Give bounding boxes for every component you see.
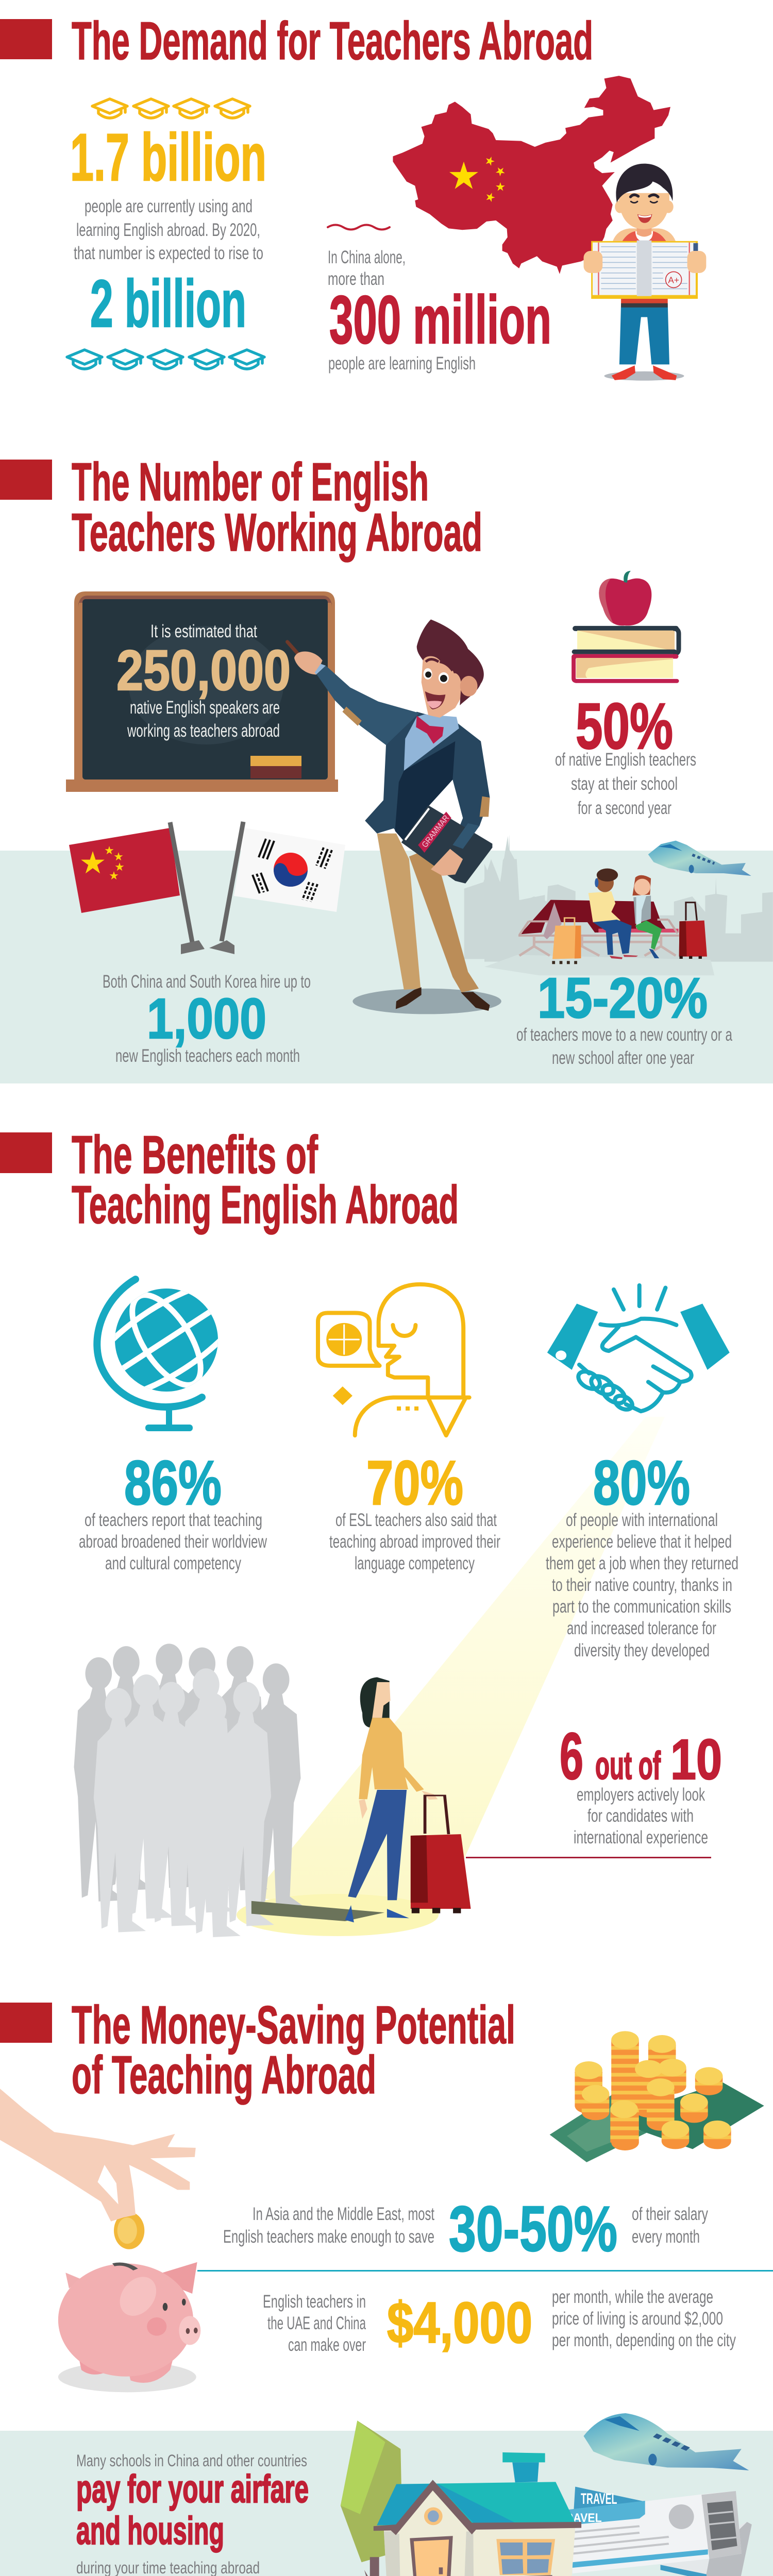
- stat: 70%: 70%: [366, 1448, 463, 1518]
- text: worldview: [79, 1510, 267, 1573]
- stat: pay for your airfare and housing: [76, 2467, 309, 2553]
- text: new teachers each month: new English teachers each month: [115, 1046, 300, 1066]
- text: per month: [552, 2287, 736, 2350]
- icons: yellow graduation caps: [92, 99, 250, 118]
- illustration: boy holding open book: [583, 164, 706, 381]
- text: employers look: [574, 1785, 708, 1848]
- text: teachers in UAE and China: the UAE and China: [267, 2313, 366, 2333]
- heading: [72, 452, 482, 563]
- stat: $4,000: $4,000: [387, 2291, 532, 2355]
- illustration: tickets, plane and house: [341, 2413, 752, 2576]
- text: worldview: and cultural competency: [105, 1553, 241, 1573]
- text: in China alone: [328, 247, 406, 289]
- text: of their salary: of their salary: [632, 2204, 708, 2224]
- stat: 250,000: 250,000: [116, 639, 291, 702]
- stat: 6 out of 10: [560, 1720, 722, 1793]
- text: employers look: employers actively look: [577, 1785, 705, 1805]
- section marker: [0, 1132, 52, 1173]
- panel: airfare and housing: [0, 2413, 773, 2576]
- text: stay for second year: for a second year: [578, 798, 671, 818]
- section 3: the benefits of teaching English abroad: [0, 1125, 738, 1937]
- stat: 80%: 80%: [593, 1448, 690, 1518]
- text: people currently learning: [74, 196, 263, 263]
- stat: 6 out of 10: 10: [670, 1728, 722, 1791]
- heading: [72, 1125, 459, 1235]
- stat: 2 billion: 2 billion: [90, 266, 246, 341]
- spotlight beam: [237, 1417, 665, 1936]
- section marker: [0, 460, 52, 500]
- illustration: travellers at airport bench: [518, 869, 708, 962]
- illustration: flag of China: [69, 822, 205, 954]
- icon: globe: [93, 1276, 218, 1431]
- section 1: the demand for teachers abroad: [0, 11, 706, 381]
- section 2: the number of English teachers working abroad: [0, 452, 773, 1083]
- text: language competency: language competency: [355, 1553, 475, 1573]
- text: worldview: abroad broadened their worldview: [79, 1532, 267, 1552]
- text: employers look: international experience: [574, 1827, 708, 1848]
- illustration: tickets, plane and house: TRAVEL: [581, 2490, 617, 2507]
- stat: 86%: 86%: [124, 1448, 222, 1518]
- illustration: plane: [648, 841, 751, 876]
- illustration: teacher pointing at board: GRAMMAR: [421, 814, 451, 850]
- text: in China alone: In China alone,: [328, 247, 406, 267]
- decorative wave: [328, 225, 390, 230]
- text: teachers in UAE and China: [263, 2292, 366, 2355]
- text: China and South Korea hire: Both China and South Korea hire up to: [103, 972, 311, 992]
- text on board continued: [127, 698, 280, 741]
- illustration: teacher pointing at board: [288, 619, 501, 1014]
- text: international experience: [546, 1510, 738, 1660]
- stat: 1.7 billion: 1.7 billion: [70, 120, 266, 195]
- text: international experience: diversity they developed: [574, 1640, 710, 1660]
- pale band: [0, 851, 773, 1083]
- stat: 1,000: 1,000: [147, 987, 266, 1050]
- heading: The Number of English: [72, 452, 429, 512]
- stat: 300 million: 300 million: [329, 282, 551, 358]
- illustration: flag of South Korea: [209, 822, 345, 954]
- text: stay for second year: [555, 750, 696, 818]
- text: employers look: for candidates with: [587, 1806, 694, 1826]
- stat: pay for your airfare and housing: pay for your airfare: [76, 2467, 309, 2511]
- text: stay for second year: of native English teachers: [555, 750, 696, 770]
- text: teachers in UAE and China: can make over: [288, 2335, 366, 2355]
- stat: 6 out of 10: out of: [595, 1744, 661, 1788]
- text: language competency: [329, 1510, 500, 1573]
- heading: [72, 1995, 515, 2105]
- text: people are learning English: people are learning English: [328, 353, 476, 374]
- chalkboard panel: [66, 591, 338, 792]
- text: teachers move: new school after one year: [552, 1048, 694, 1068]
- text: people currently learning: that number is expected to rise to: [74, 243, 263, 263]
- section marker: [0, 2003, 52, 2043]
- text: in China alone: more than: [328, 269, 384, 289]
- text: teachers in UAE and China: English teachers in: [263, 2292, 366, 2312]
- text: stay for second year: stay at their school: [571, 774, 678, 794]
- illustration: tickets, plane and house: TRAVEL: [559, 2511, 602, 2524]
- heading: of Teaching Abroad: [72, 2045, 376, 2105]
- stat: pay for your airfare and housing: and housing: [76, 2509, 224, 2553]
- icons: teal graduation caps: [67, 350, 264, 369]
- illustration: crowd of grey silhouettes: [74, 1643, 304, 1937]
- text: language competency: teaching abroad improved their: [329, 1532, 500, 1552]
- illustration: hand dropping coin: [0, 2089, 196, 2249]
- text: people currently learning: learning English abroad. By 2020,: [76, 220, 260, 240]
- text on board: It is estimated that: [150, 621, 257, 641]
- illustration: piggy bank: [58, 2262, 200, 2392]
- heading: The Benefits of: [72, 1125, 318, 1185]
- stat: 6 out of 10: 6: [560, 1720, 583, 1793]
- heading: Teaching English Abroad: [72, 1175, 459, 1235]
- stat: 30-50%: 30-50%: [449, 2194, 617, 2265]
- text: savings: English teachers make enough to save: [223, 2227, 434, 2247]
- heading: Teachers Working Abroad: [72, 503, 482, 563]
- illustration: coin stacks on banknotes: [550, 2031, 764, 2162]
- text on board continued: native English speakers are: [130, 698, 280, 718]
- text: of their salary: every month: [632, 2227, 700, 2247]
- stat: 50%: 50%: [576, 690, 673, 762]
- section marker: [0, 19, 52, 59]
- text: teachers move: [516, 1025, 732, 1068]
- illustration: city skyline: [464, 835, 773, 975]
- heading: The Money-Saving Potential: [72, 1995, 515, 2055]
- illustration: apple on books: [572, 571, 679, 681]
- stat: 15-20%: 15-20%: [537, 967, 708, 1030]
- text: people currently learning: people are currently using and: [85, 196, 253, 216]
- icon: speaking head: [318, 1284, 469, 1435]
- illustration: boy holding open book: A+: [668, 275, 679, 285]
- illustration: woman with suitcase in spotlight: [251, 1677, 472, 1922]
- icon: handshake: [547, 1285, 730, 1412]
- text: many schools: Many schools in China and other countries: [76, 2451, 307, 2470]
- eraser: [250, 756, 301, 778]
- text: worldview: of teachers report that teaching: [85, 1510, 262, 1530]
- text on board continued: working as teachers abroad: [127, 721, 280, 741]
- text: savings: [223, 2204, 434, 2247]
- text: of their salary: [632, 2204, 708, 2247]
- text: savings: In Asia and the Middle East, most: [253, 2204, 434, 2224]
- section 4: the money-saving potential of teaching abroad: [0, 1995, 773, 2392]
- text: language competency: of ESL teachers also said that: [335, 1510, 497, 1530]
- map of China with flag stars: [393, 76, 670, 274]
